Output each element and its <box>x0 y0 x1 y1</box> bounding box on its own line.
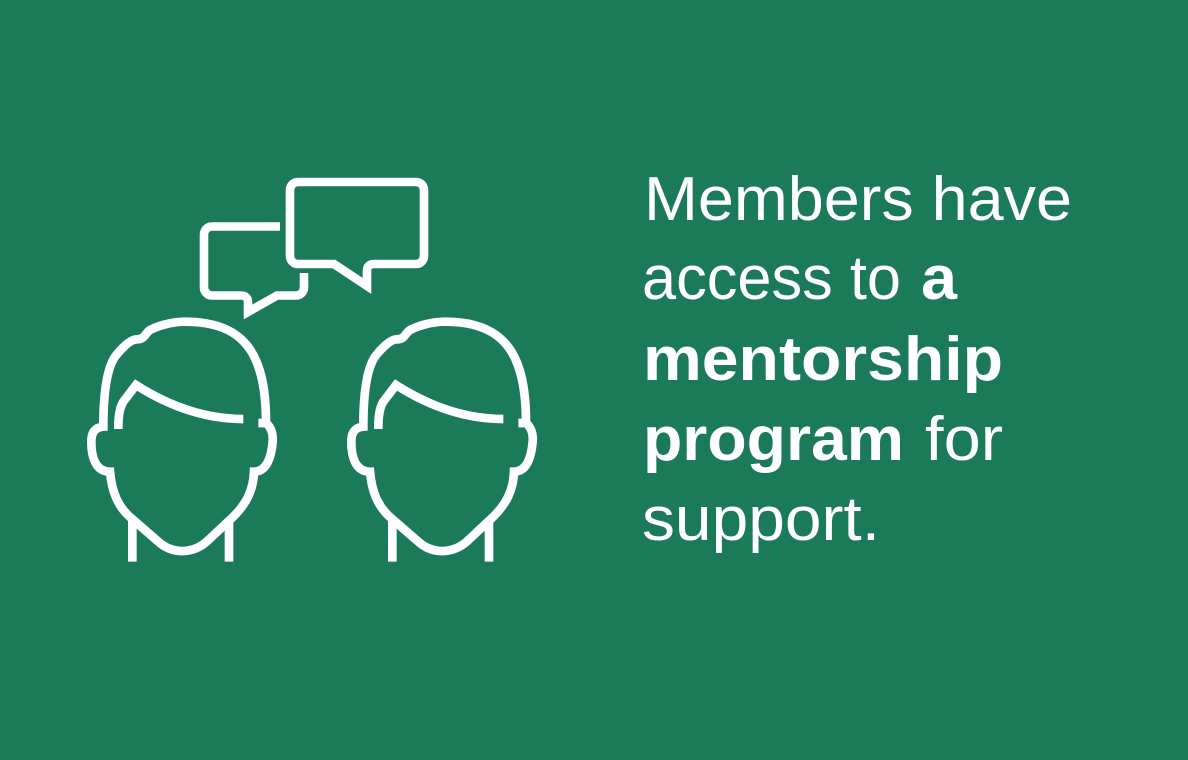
icon: small speech bubble <box>204 226 304 312</box>
text block: mentorship message: access to <box>642 244 901 313</box>
text block: mentorship message <box>642 165 1072 554</box>
text block: mentorship message: support. <box>642 485 880 554</box>
text block: mentorship message: program <box>643 405 904 474</box>
icon: left head <box>91 322 273 562</box>
text block: mentorship message: Members have <box>644 165 1072 234</box>
icon: right head <box>351 322 533 562</box>
icon: large speech bubble <box>290 182 424 286</box>
icon: two people talking <box>91 182 533 562</box>
text block: mentorship message: mentorship <box>643 325 1003 394</box>
text block: mentorship message: a <box>921 244 958 313</box>
text block: mentorship message: for <box>925 405 1003 474</box>
